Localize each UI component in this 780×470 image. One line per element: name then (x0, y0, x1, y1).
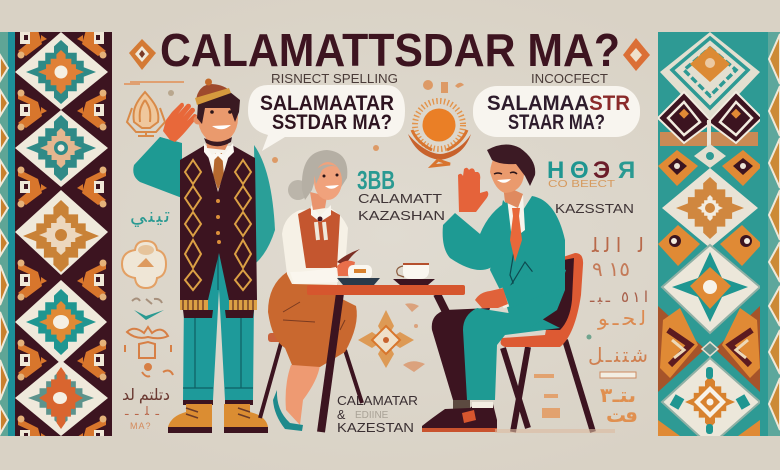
right script and ornaments column: لحـو (597, 308, 646, 330)
jacket (490, 196, 565, 328)
bottom caption: KAZESTAN (337, 421, 414, 435)
teal and maroon script glyphs right: Θ (570, 157, 589, 184)
shirt and vest (204, 146, 234, 200)
forearm resting (503, 262, 566, 308)
other arm sleeve (254, 145, 275, 263)
legs (286, 365, 320, 425)
figure: seated man in teal suit (422, 144, 593, 432)
teal and maroon script glyphs right: Э (593, 157, 610, 184)
left patterned carpet panel (15, 18, 112, 456)
trousers (183, 253, 254, 400)
bottom caption (337, 394, 418, 435)
bottom caption: & (337, 408, 346, 422)
vest fringe (180, 300, 257, 310)
left zigzag border strip (0, 32, 15, 436)
correct spelling label: RISNECT SPELLING (271, 72, 398, 86)
right cup (393, 263, 435, 285)
right zigzag border strip (760, 32, 780, 436)
right bubble text (487, 92, 630, 134)
left script text: ـلــ (124, 404, 159, 418)
chair (260, 343, 362, 418)
right script and ornaments column: ڡت (606, 405, 638, 427)
back leg (432, 308, 490, 400)
ground shadow (495, 429, 615, 433)
right script and ornaments column (588, 235, 648, 427)
table with cups (307, 263, 465, 432)
right speech bubble (473, 86, 640, 137)
right bubble text: STAAR MA? (508, 111, 605, 134)
chair (565, 340, 593, 432)
caption: Calamatt Kazashan: CALAMATT (358, 191, 442, 206)
left teal script: تيني (130, 205, 170, 228)
raised hand (458, 168, 488, 212)
raised arm sleeve (133, 137, 182, 198)
hand (163, 103, 197, 142)
left script text: دتلتم لد (122, 387, 170, 404)
right script and ornaments column: شتنـل (588, 345, 648, 367)
icon: left title ornament (129, 39, 156, 70)
right script and ornaments column: ا٥١ ـبـ (589, 289, 648, 306)
incorrect label: INCOCFECT (531, 72, 608, 86)
left bubble text: SSTDAR MA? (272, 111, 392, 134)
head (205, 130, 231, 150)
head (503, 185, 523, 208)
hat (196, 84, 229, 100)
shirt and tie (507, 195, 525, 240)
ornaments under right script (534, 334, 636, 418)
left bubble text (260, 92, 394, 134)
left small ornaments column (125, 298, 173, 376)
right script and ornaments column: ٮتـ٣ (600, 385, 636, 407)
teal script glyphs centre left: 3BB (357, 165, 395, 195)
title: CALAMATTSDAR MA? (160, 24, 620, 76)
teal and maroon script glyphs right (547, 157, 635, 184)
right patterned carpet panel (658, 32, 762, 446)
left script text (122, 387, 170, 418)
figure: man in traditional vest (133, 78, 275, 433)
left bubble text: SALAMAATAR (260, 92, 394, 115)
small ornaments near labels (272, 80, 464, 163)
small ornaments below table (403, 303, 425, 372)
head (288, 180, 308, 200)
bottom caption: CALAMATAR (337, 394, 418, 408)
right script and ornaments column: ١٥ ٩ (592, 259, 630, 281)
icon: centre star ornament (358, 310, 414, 368)
shoe (422, 404, 497, 432)
right script and ornaments column: ﻟ ﺍﻟﻠ (591, 235, 644, 257)
left cup (337, 265, 380, 285)
correct caption faded: CO BEECT (548, 179, 615, 190)
left speech bubble (248, 85, 405, 151)
caption: ma?: MA? (130, 421, 152, 431)
teal and maroon script glyphs right: Н (547, 157, 564, 184)
vest gold diamonds (185, 160, 251, 290)
blouse (282, 208, 348, 285)
caption: Calamatt Kazashan: KAZASHAN (358, 208, 445, 223)
front leg (463, 308, 560, 400)
boots (168, 404, 268, 427)
bottom caption: EDIINE (355, 410, 389, 421)
teal and maroon script glyphs right: Я (618, 157, 635, 184)
right bubble text: SALAMAASTR (487, 92, 630, 115)
figure: seated woman (260, 150, 362, 431)
left medallion ornament (122, 241, 166, 288)
resting hand (475, 288, 508, 308)
sleeve raised (443, 200, 510, 270)
icon: right title ornament (623, 38, 650, 71)
caption: Kazsstan: KAZSSTAN (555, 202, 634, 216)
icon: left tribal crest (124, 82, 184, 136)
caption: Calamatt Kazashan (358, 191, 445, 223)
skirt (268, 272, 357, 367)
icon: sun and eagle emblem (408, 101, 471, 166)
